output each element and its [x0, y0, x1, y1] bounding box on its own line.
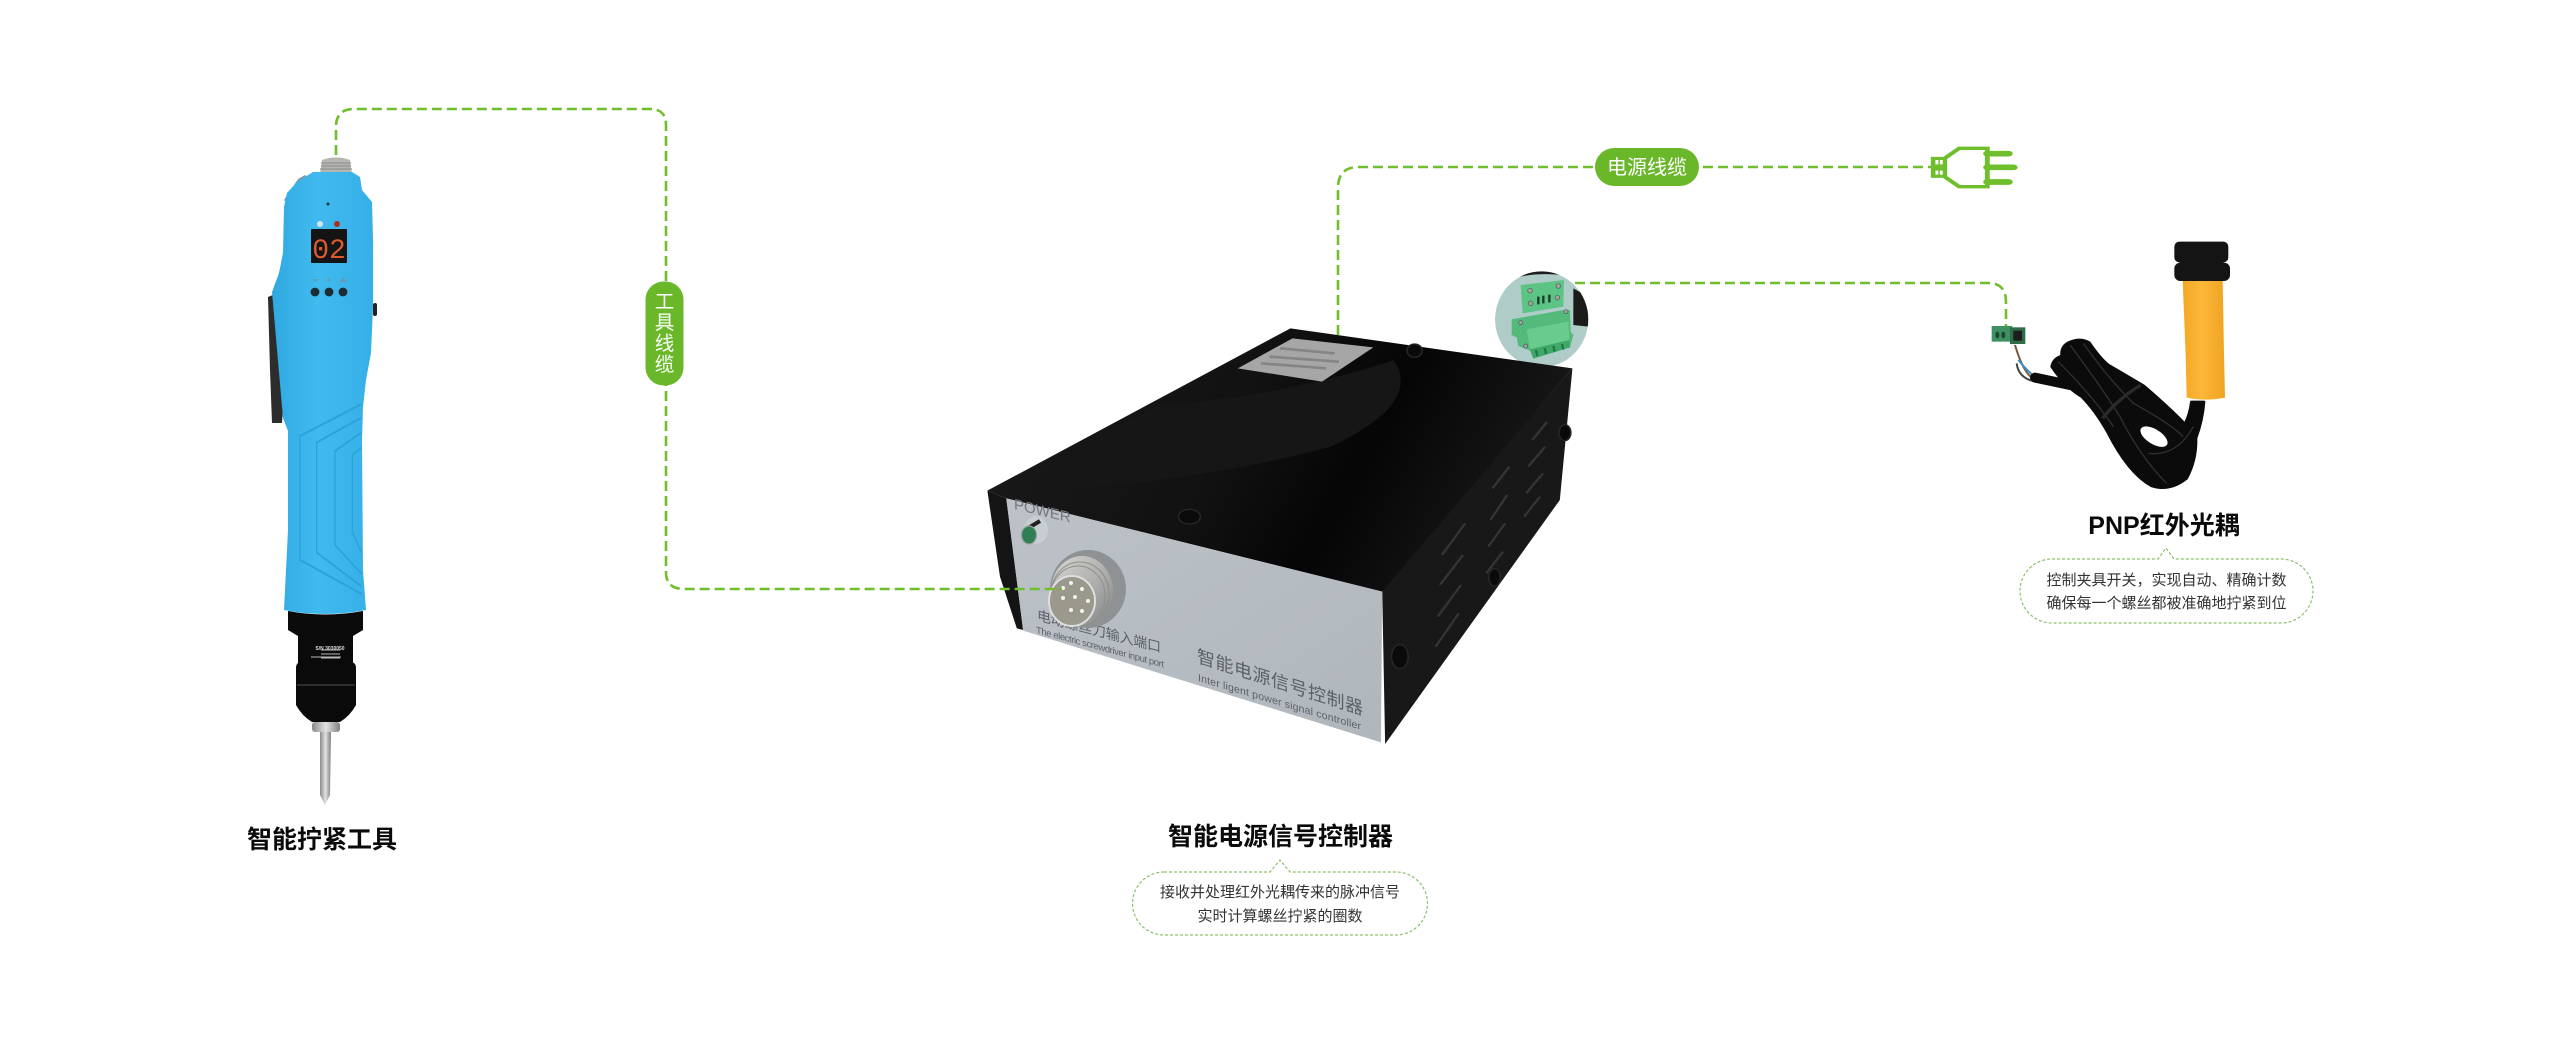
power lamp — [1022, 516, 1048, 544]
front panel — [1006, 498, 1382, 742]
grip chevrons — [300, 404, 362, 594]
label pill: tool cable: 缆 — [655, 354, 674, 376]
label pill: power cable — [1595, 148, 1699, 186]
blue body — [272, 172, 373, 614]
front panel text: port label english: The electric screwdriver input port — [1036, 625, 1164, 671]
display panel — [311, 229, 347, 263]
top indicator lamps — [317, 202, 340, 227]
sensor wires — [2015, 345, 2035, 381]
buttons — [311, 277, 347, 296]
infographic canvas — [248, 108, 2314, 936]
icon: power plug — [1933, 148, 2013, 187]
callout: sensor description: 确保每一个螺丝都被准确地拧紧到位 — [2046, 595, 2287, 612]
round detail: terminal block — [1493, 270, 1590, 367]
hanging hook — [284, 175, 312, 203]
top panel — [987, 328, 1572, 592]
callout: controller description — [1133, 860, 1428, 935]
dashed line: tool cable — [336, 109, 1062, 589]
screws — [1178, 344, 1571, 669]
callout: sensor description: 控制夹具开关，实现自动、精确计数 — [2046, 572, 2287, 589]
product: PNP infrared sensor — [1992, 242, 2230, 488]
right side panel — [1382, 368, 1572, 744]
callout: controller description: 接收并处理红外光耦传来的脉冲信号 — [1160, 884, 1400, 901]
product: signal controller — [987, 328, 1572, 744]
yellow sensor body — [2183, 281, 2225, 400]
silver cable connector — [320, 158, 352, 174]
green mini terminal — [1992, 326, 2025, 344]
bit holder and shaft — [312, 722, 340, 805]
dashed line: sensor signal cable — [1575, 283, 2006, 327]
belt clip — [268, 294, 284, 423]
label pill: tool cable: 线 — [655, 333, 674, 355]
front panel text: port label: 电动螺丝刀输入端口 — [1037, 607, 1161, 656]
label pill: power cable: 电源线缆 — [1607, 156, 1687, 179]
front panel text: product name english: Inter ligent power signal controller — [1198, 672, 1361, 733]
serial number on adjuster: S/N 3030050 — [315, 646, 345, 652]
label pill: tool cable — [646, 282, 684, 386]
sensor cable bundle — [2035, 340, 2204, 488]
callout: sensor description — [2020, 548, 2313, 623]
aviation connector — [1049, 550, 1126, 628]
label pill: tool cable: 具 — [655, 312, 674, 334]
heading: signal controller: 智能电源信号控制器 — [1168, 823, 1393, 851]
side switch — [373, 303, 377, 316]
front panel text: power: POWER — [1014, 496, 1071, 527]
front panel text: product name: 智能电源信号控制器 — [1197, 645, 1363, 719]
heading: smart tightening tool: 智能拧紧工具 — [247, 826, 397, 854]
product: smart screwdriver — [268, 158, 377, 805]
left edge — [987, 491, 1023, 630]
ventilation slots — [1436, 422, 1547, 647]
rating sticker — [1238, 338, 1373, 382]
display digits: 02 — [312, 236, 346, 267]
label pill: tool cable: 工 — [655, 291, 674, 313]
sensor black cap — [2174, 242, 2230, 281]
dashed line: power cable — [1338, 167, 1933, 335]
callout: controller description: 实时计算螺丝拧紧的圈数 — [1197, 907, 1363, 925]
heading: PNP sensor: PNP红外光耦 — [2088, 512, 2240, 540]
black collar and torque adjuster — [288, 611, 363, 722]
